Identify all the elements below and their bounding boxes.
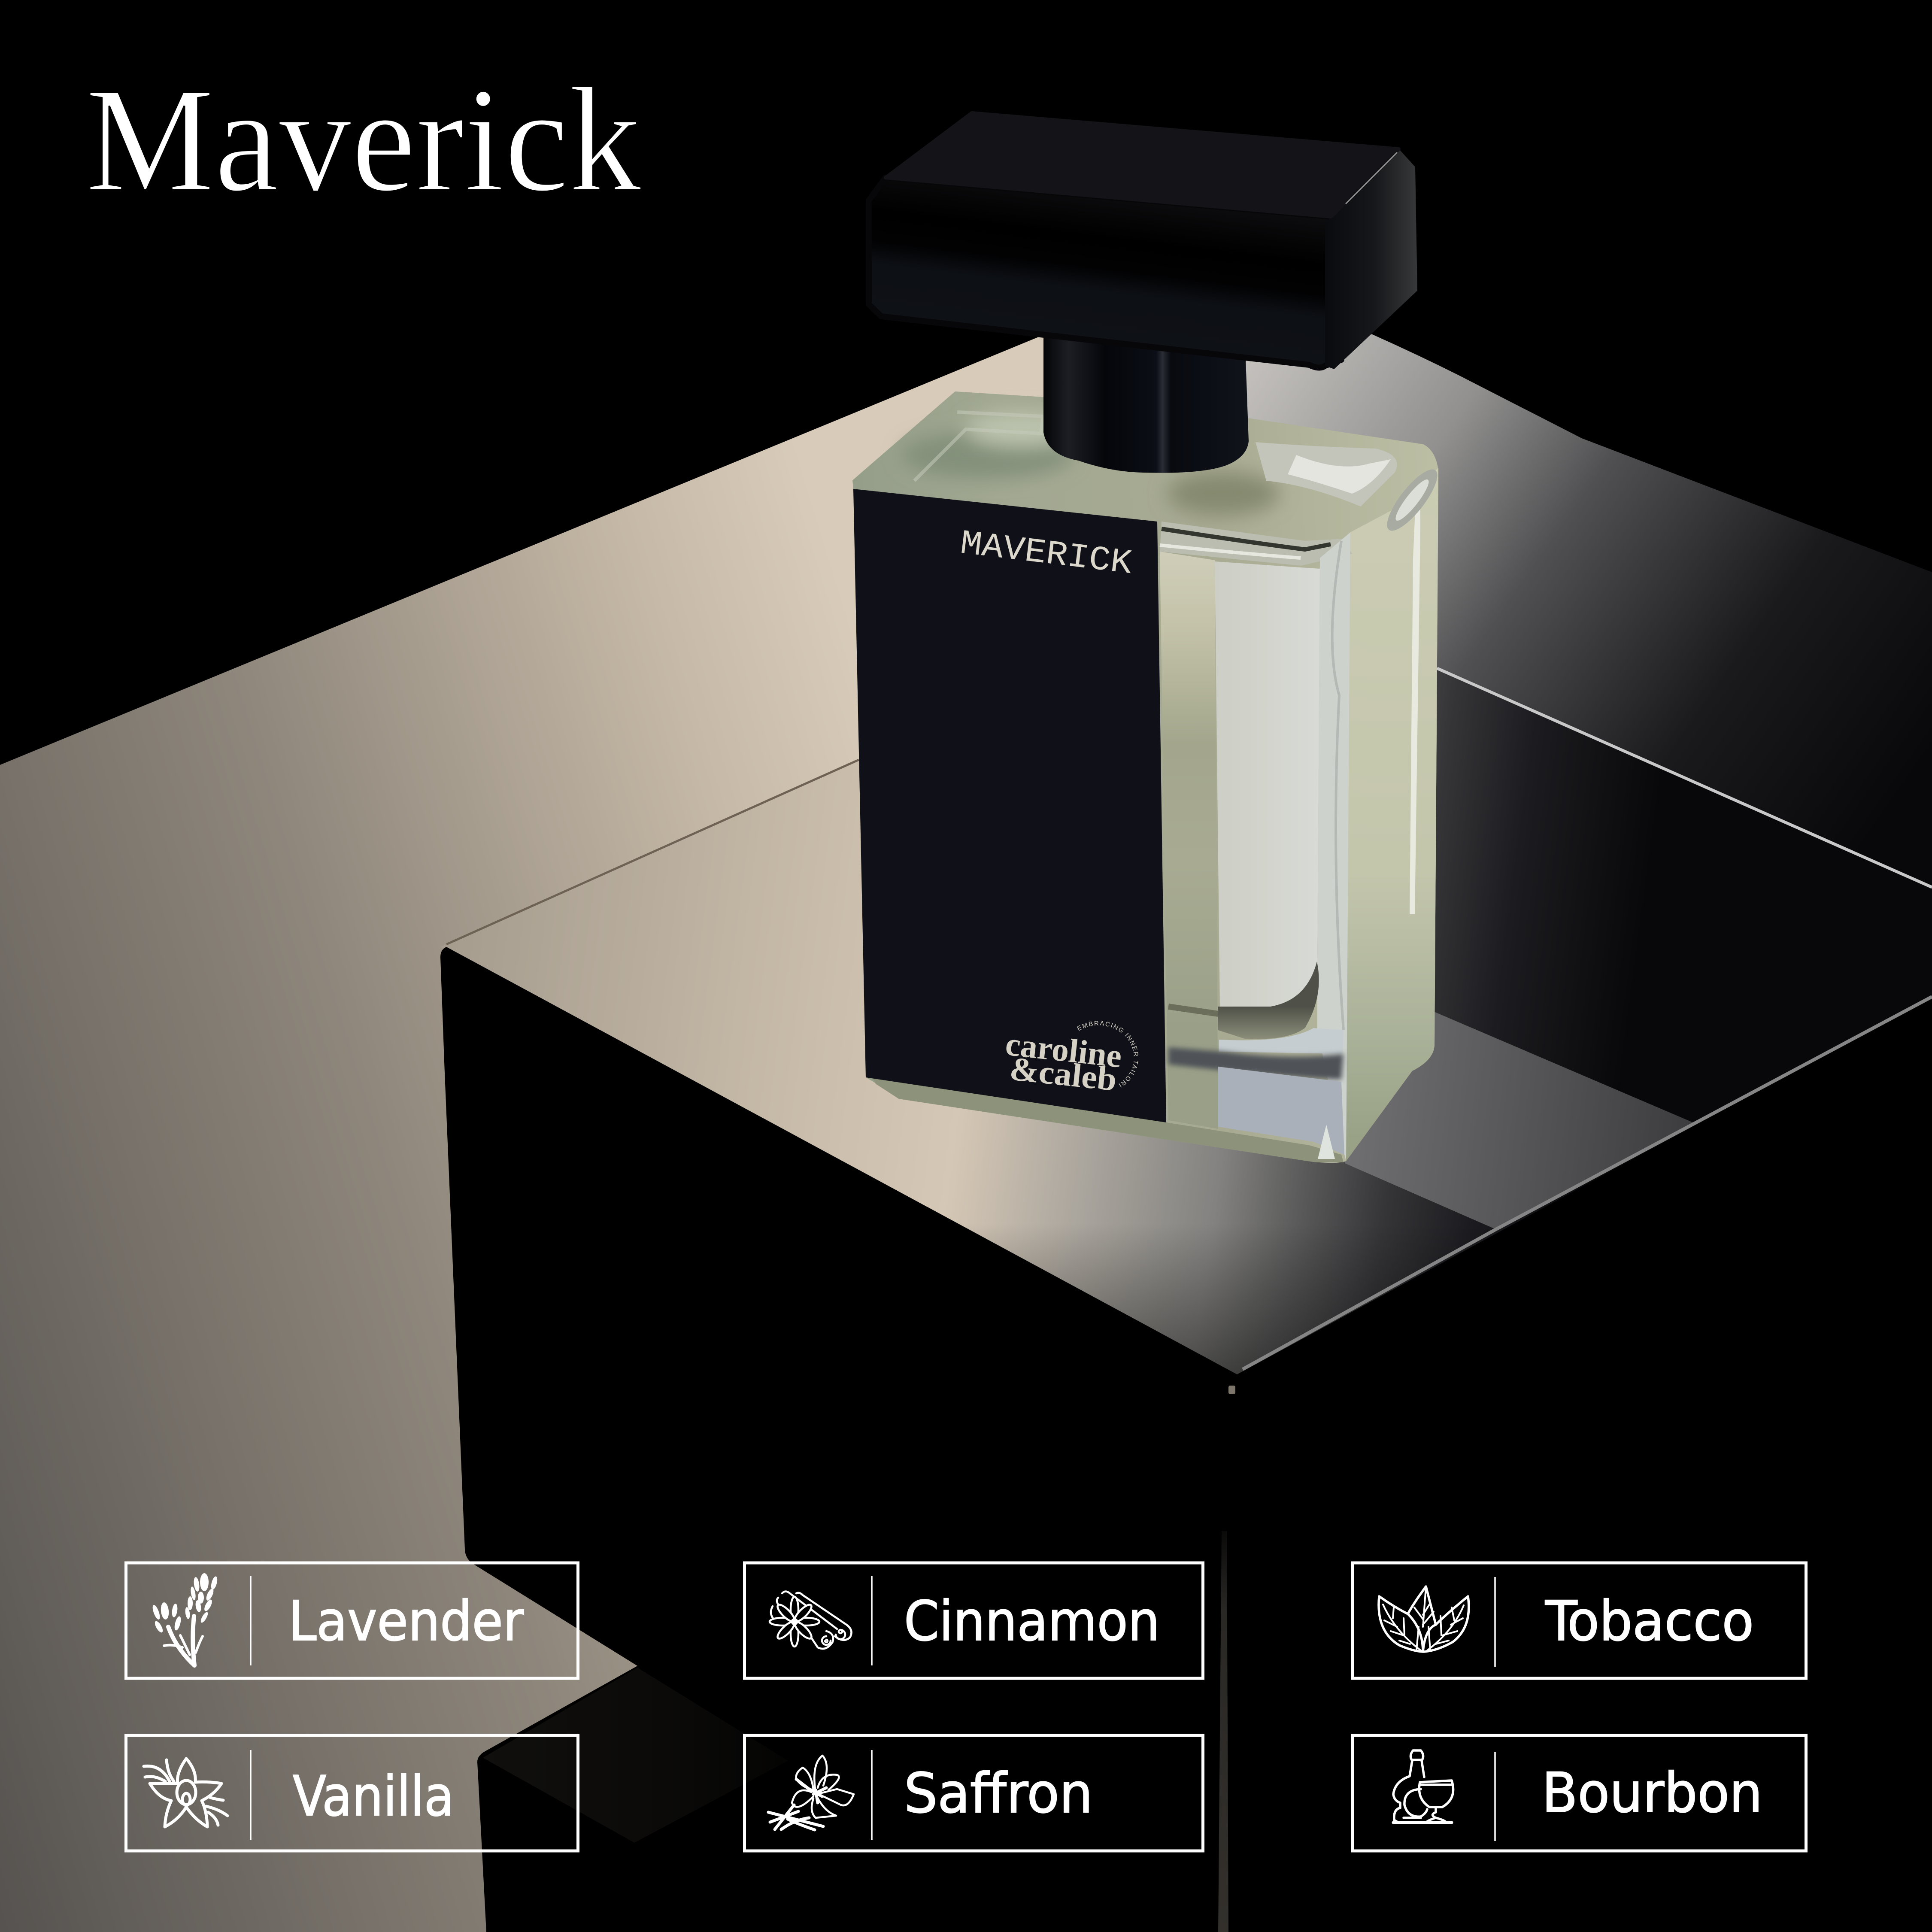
shoulder shading	[901, 412, 1279, 515]
card: Saffron	[744, 1735, 1203, 1851]
green refraction stripe	[1160, 552, 1218, 1129]
card: Vanilla	[126, 1735, 578, 1851]
cap	[869, 113, 1417, 369]
pillar reflection shadow	[483, 1668, 788, 1843]
icon: tobacco leaves	[1379, 1586, 1469, 1652]
bottom glass strip	[871, 1075, 1344, 1162]
pillar corner spot	[1228, 1386, 1235, 1394]
label: Vanilla: Vanilla	[293, 1765, 454, 1829]
cap edge glint	[1346, 152, 1397, 204]
neck collar	[1043, 335, 1249, 473]
right side panel	[1346, 468, 1438, 1161]
icon: vanilla flower	[144, 1759, 227, 1827]
pale blue glass	[1219, 1028, 1344, 1054]
label: Saffron: Saffron	[904, 1762, 1093, 1826]
reflected gray band	[1331, 966, 1693, 1229]
corner column	[1317, 532, 1350, 1161]
back right edge	[1437, 668, 1932, 887]
label: Lavender: Lavender	[288, 1589, 524, 1653]
icon: lavender	[151, 1573, 218, 1665]
card: Bourbon	[1352, 1735, 1806, 1851]
brand logo: caroline	[1004, 1025, 1124, 1075]
perfume bottle	[0, 0, 1445, 1163]
cap front face	[869, 178, 1341, 368]
left base line	[1168, 1007, 1218, 1014]
label: Tobacco: Tobacco	[1545, 1589, 1754, 1653]
title: Maverick	[85, 57, 641, 223]
cap top face	[886, 113, 1399, 217]
vertical pillar edge	[1218, 1531, 1228, 1932]
top reflection	[914, 412, 1445, 537]
white liquid pane	[1215, 561, 1320, 1009]
beige wall left	[0, 326, 1223, 1932]
card: Lavender	[126, 1563, 578, 1678]
label: Cinnamon: Cinnamon	[904, 1589, 1160, 1653]
card: Cinnamon	[744, 1563, 1203, 1678]
pillar front	[440, 947, 1932, 1932]
brand logo: EMBRACING INNER TAILORING	[0, 0, 1140, 1089]
glass body	[852, 391, 1438, 1163]
label name: MAVERICK	[958, 524, 1134, 584]
column edge line	[1332, 541, 1344, 1030]
bottom corner sparkle	[1318, 1125, 1335, 1159]
cap right face	[1325, 149, 1417, 369]
gray wall right	[1223, 331, 1932, 901]
front corner shading	[944, 1223, 1545, 1395]
icon: cinnamon and star anise	[770, 1592, 852, 1649]
pillar front edge highlight	[1243, 997, 1932, 1369]
icon: saffron flower	[768, 1756, 854, 1830]
glass ledge	[1160, 522, 1352, 566]
dark glass band	[1168, 1047, 1344, 1080]
label	[853, 489, 1166, 1122]
pillar top surface	[440, 585, 1932, 1395]
label: Bourbon: Bourbon	[1542, 1761, 1762, 1825]
right bright strip	[1410, 481, 1420, 914]
brand logo: &caleb	[1008, 1049, 1119, 1098]
lower blue glass	[1218, 1067, 1344, 1155]
icon: bourbon bottle and glass	[1393, 1750, 1453, 1823]
back left edge	[446, 760, 859, 944]
liquid base dark band	[1218, 961, 1319, 1039]
card: Tobacco	[1352, 1563, 1806, 1678]
